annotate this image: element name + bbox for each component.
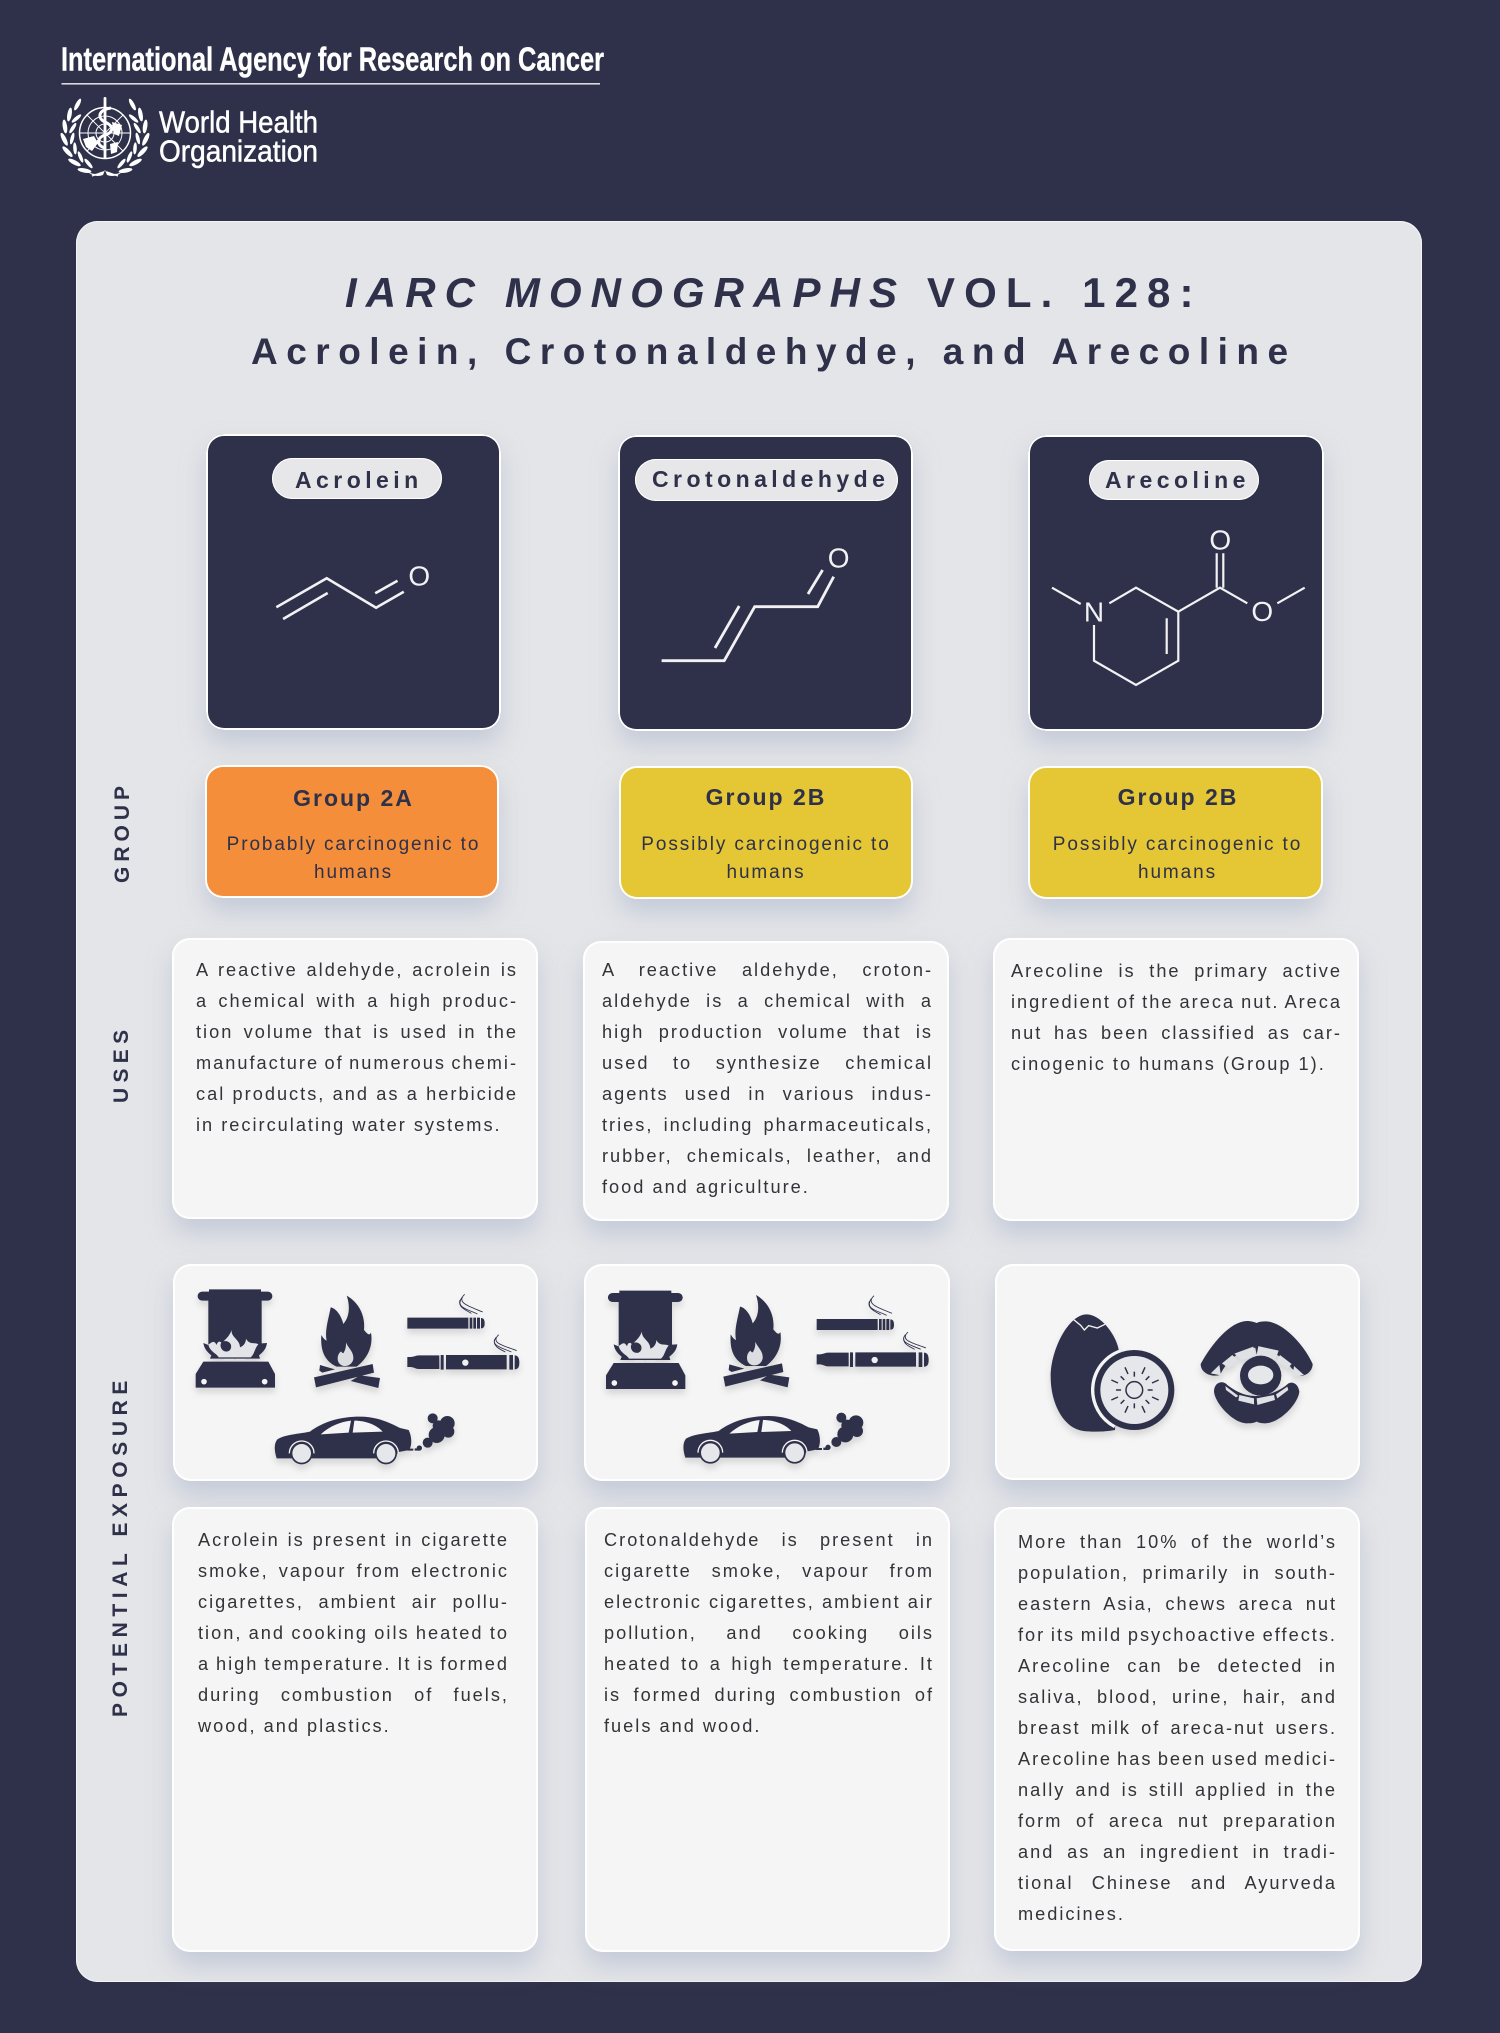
row label: potential exposure: POTENTIAL EXPOSURE <box>109 1375 132 1717</box>
text: uses acrolein: tion volume that is used in the <box>196 1022 518 1042</box>
text: exposure arecoline: eastern Asia, chews areca nut <box>1018 1594 1337 1614</box>
text: exposure acrolein: tion, and cooking oils heated to <box>198 1623 509 1643</box>
text: exposure crotonaldehyde: heated to a high temperature. It <box>604 1654 934 1674</box>
chemical structure: crotonaldehyde <box>662 543 849 662</box>
text: probably carcinogenic: Probably carcinogenic to <box>227 834 480 855</box>
chemical structure: arecoline: N <box>1084 596 1104 628</box>
chemical structure: acrolein <box>276 560 430 620</box>
text: exposure arecoline: for its mild psychoactive effects. <box>1018 1625 1337 1645</box>
heading: Group 2B: Group 2B <box>1118 784 1238 810</box>
icon: mouth chewing nut <box>1201 1321 1313 1423</box>
panel: exposure text acrolein <box>172 1507 538 1952</box>
panel: exposure icons arecoline <box>995 1264 1360 1480</box>
chemical structure: arecoline <box>1052 524 1306 686</box>
chemical structure: arecoline: O <box>1251 596 1273 627</box>
panel: exposure text crotonaldehyde <box>585 1507 950 1952</box>
text: uses acrolein <box>196 960 518 1135</box>
text: probably carcinogenic <box>227 834 480 883</box>
text: exposure arecoline: tional Chinese and Ayurveda <box>1018 1873 1337 1893</box>
text: exposure crotonaldehyde <box>604 1530 934 1736</box>
text: exposure acrolein: Acrolein is present in cigarette <box>198 1530 509 1550</box>
text: uses acrolein: in recirculating water systems. <box>196 1115 502 1135</box>
icon: cooking pot on stove <box>606 1291 685 1389</box>
text: uses crotonaldehyde: used to synthesize chemical <box>602 1053 933 1073</box>
label: Crotonaldehyde: Crotonaldehyde <box>652 466 889 492</box>
text: exposure crotonaldehyde: fuels and wood. <box>604 1716 761 1736</box>
text: uses crotonaldehyde: A reactive aldehyde, croton- <box>602 960 933 980</box>
text: uses acrolein: A reactive aldehyde, acrolein is <box>196 960 518 980</box>
panel: uses arecoline <box>993 938 1359 1221</box>
icon: cigarette <box>407 1294 485 1329</box>
text: uses arecoline <box>1011 961 1342 1074</box>
text: uses acrolein: manufacture of numerous chemi- <box>196 1053 518 1073</box>
text: uses arecoline: cinogenic to humans (Group 1). <box>1011 1054 1326 1074</box>
heading: Group 2A: Group 2A <box>293 785 414 811</box>
icon: cigarette <box>817 1296 894 1330</box>
text: uses acrolein: cal products, and as a herbicide <box>196 1084 518 1104</box>
text: exposure arecoline: nally and is still applied in the <box>1018 1780 1337 1800</box>
text: possibly carcinogenic: Possibly carcinogenic to <box>641 834 891 855</box>
chemical structure: crotonaldehyde: O <box>828 543 849 574</box>
icon: WHO emblem <box>59 97 151 176</box>
text: exposure arecoline: medicines. <box>1018 1904 1125 1924</box>
text: uses acrolein: a chemical with a high produc- <box>196 991 518 1011</box>
icon: e-cigarette <box>817 1332 929 1367</box>
panel: crotonaldehyde structure <box>618 435 913 731</box>
text: uses arecoline: Arecoline is the primary active <box>1011 961 1342 981</box>
text: World Health Organization <box>159 104 318 168</box>
text: World Health Organization: World Health <box>159 104 318 140</box>
panel: uses acrolein <box>172 938 538 1219</box>
text: exposure arecoline: breast milk of areca-nut users. <box>1018 1718 1337 1738</box>
text: uses crotonaldehyde: high production volume that is <box>602 1022 933 1042</box>
text: possibly carcinogenic <box>1053 834 1302 883</box>
text: possibly carcinogenic: humans <box>726 862 806 883</box>
text: possibly carcinogenic: Possibly carcinogenic to <box>1053 834 1302 855</box>
panel: exposure text arecoline <box>994 1507 1360 1951</box>
row label: uses: USES <box>110 1025 133 1103</box>
heading: International Agency for Research on Cancer: International Agency for Research on Cancer <box>61 40 604 78</box>
panel: group 2B arecoline <box>1028 766 1323 899</box>
text: World Health Organization: Organization <box>159 134 318 168</box>
heading: Group 2B: Group 2B <box>706 784 826 810</box>
text: exposure arecoline: saliva, blood, urine, hair, and <box>1018 1687 1337 1707</box>
label: Arecoline: Arecoline <box>1105 467 1250 493</box>
text: exposure acrolein: wood, and plastics. <box>198 1716 391 1736</box>
icon: areca nut <box>1051 1314 1174 1432</box>
text: uses crotonaldehyde: food and agriculture. <box>602 1177 810 1197</box>
text: possibly carcinogenic <box>641 834 891 883</box>
chemical structure: arecoline: O <box>1209 524 1231 555</box>
panel: acrolein structure <box>206 434 501 730</box>
text: exposure acrolein: smoke, vapour from electronic <box>198 1561 509 1581</box>
text: exposure arecoline: population, primarily in south- <box>1018 1563 1337 1583</box>
text: exposure acrolein: a high temperature. It is formed <box>198 1654 509 1674</box>
panel: uses crotonaldehyde <box>583 941 949 1221</box>
chemical structure: acrolein: O <box>408 560 430 592</box>
text: possibly carcinogenic: humans <box>1138 862 1217 883</box>
text: exposure arecoline <box>1018 1532 1337 1924</box>
row label: group: GROUP <box>111 781 134 883</box>
text: uses crotonaldehyde: rubber, chemicals, leather, and <box>602 1146 933 1166</box>
text: exposure arecoline: Arecoline has been used medici- <box>1018 1749 1337 1769</box>
panel: header logos <box>60 40 604 177</box>
text: exposure acrolein: during combustion of fuels, <box>198 1685 509 1705</box>
text: exposure crotonaldehyde: Crotonaldehyde is present in <box>604 1530 934 1550</box>
panel: exposure icons acrolein <box>173 1264 538 1481</box>
icon: car exhaust <box>683 1413 863 1464</box>
panel: exposure icons crotonaldehyde <box>584 1264 950 1481</box>
text: exposure crotonaldehyde: pollution, and cooking oils <box>604 1623 934 1643</box>
label: Acrolein: Acrolein <box>295 467 423 493</box>
text: exposure crotonaldehyde: is formed during combustion of <box>604 1685 934 1705</box>
panel: arecoline structure <box>1028 435 1324 731</box>
icon: car exhaust <box>275 1413 455 1464</box>
icon: campfire <box>314 1296 380 1388</box>
text: uses crotonaldehyde: tries, including pharmaceuticals, <box>602 1115 933 1135</box>
icon: campfire <box>723 1295 789 1387</box>
icon: cooking pot on stove <box>196 1289 275 1388</box>
text: uses crotonaldehyde <box>602 960 933 1197</box>
title: IARC MONOGRAPHS VOL. 128: <box>345 269 1203 316</box>
text: uses crotonaldehyde: agents used in various indus- <box>602 1084 933 1104</box>
text: exposure arecoline: Arecoline can be detected in <box>1018 1656 1337 1676</box>
text: exposure acrolein: cigarettes, ambient air pollu- <box>198 1592 509 1612</box>
text: exposure arecoline: form of areca nut preparation <box>1018 1811 1337 1831</box>
subtitle: Acrolein, Crotonaldehyde, and Arecoline <box>251 331 1297 372</box>
icon: e-cigarette <box>407 1335 519 1370</box>
text: probably carcinogenic: humans <box>314 862 393 883</box>
text: exposure crotonaldehyde: electronic cigarettes, ambient air <box>604 1592 934 1612</box>
text: exposure arecoline: and as an ingredient in tradi- <box>1018 1842 1337 1862</box>
text: uses arecoline: nut has been classified as car- <box>1011 1023 1342 1043</box>
label: Arecoline <box>1089 460 1259 500</box>
panel: group 2B crotonaldehyde <box>619 766 913 899</box>
text: exposure crotonaldehyde: cigarette smoke, vapour from <box>604 1561 934 1581</box>
label: Crotonaldehyde <box>635 459 898 501</box>
text: uses crotonaldehyde: aldehyde is a chemical with a <box>602 991 933 1011</box>
label: Acrolein <box>272 458 442 499</box>
panel: group 2A <box>205 765 499 898</box>
panel: main content <box>76 221 1422 1982</box>
text: uses arecoline: ingredient of the areca nut. Areca <box>1011 992 1342 1012</box>
text: exposure arecoline: More than 10% of the world’s <box>1018 1532 1337 1552</box>
text: exposure acrolein <box>198 1530 509 1736</box>
